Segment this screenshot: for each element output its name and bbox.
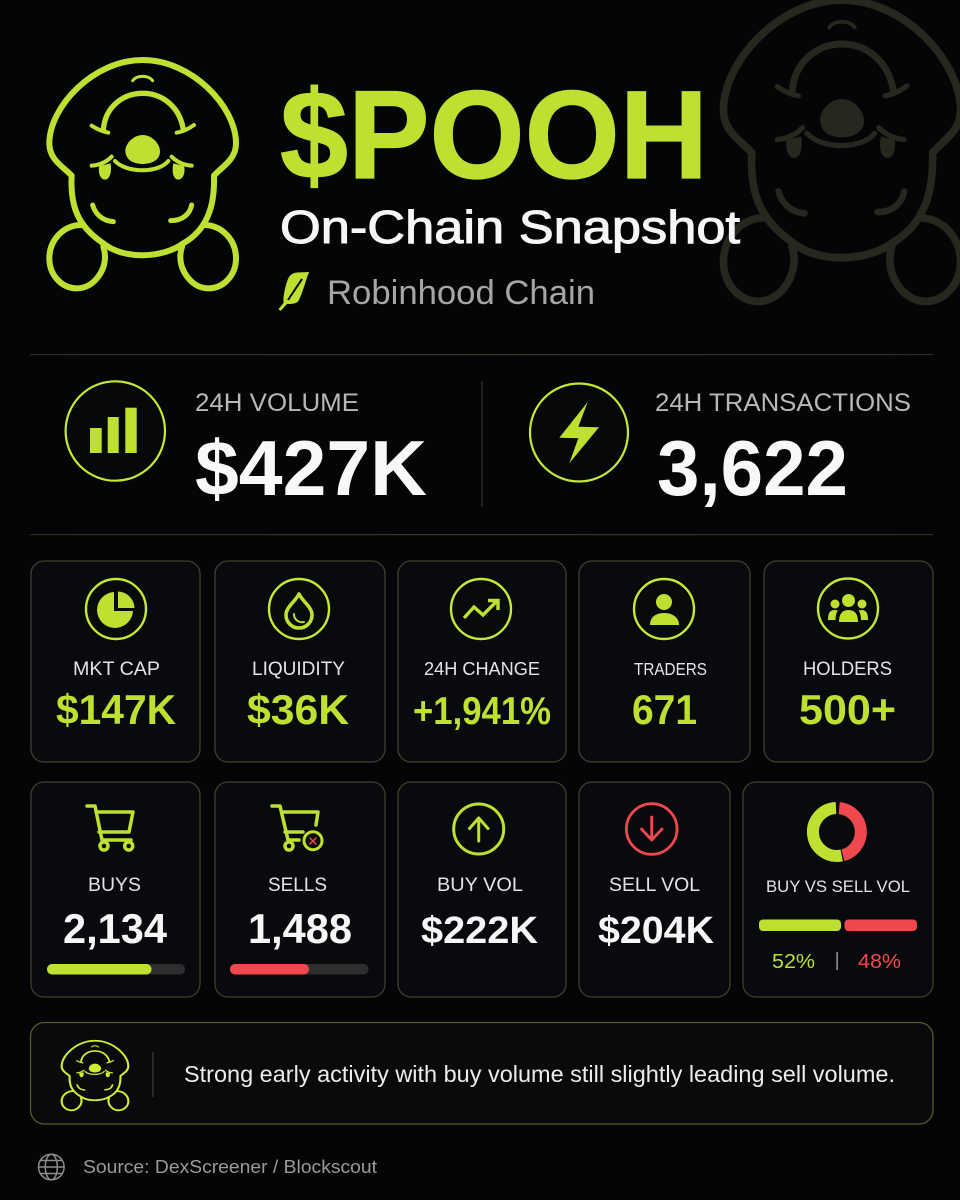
panel: summary callout xyxy=(30,1022,933,1124)
panel: buys xyxy=(31,782,200,997)
icon: bar chart xyxy=(66,381,165,481)
split bar xyxy=(759,920,917,931)
icon: cart xyxy=(87,806,133,850)
sells progress bar xyxy=(230,964,368,974)
panel: holders xyxy=(764,561,933,762)
change value: +1,941% xyxy=(413,690,551,733)
buy percentage: 52% xyxy=(772,951,815,973)
buy volume label: BUY VOL xyxy=(437,875,523,896)
icon: person xyxy=(634,579,694,639)
traders value: 671 xyxy=(632,686,697,733)
holders label: HOLDERS xyxy=(803,659,892,680)
volume label: 24H VOLUME xyxy=(195,389,359,417)
change label: 24H CHANGE xyxy=(424,659,540,679)
buys label: BUYS xyxy=(88,875,141,896)
panel: 24h transactions xyxy=(530,384,911,512)
icon: lightning bolt xyxy=(530,384,628,482)
subtitle: On-Chain Snapshot xyxy=(280,201,740,253)
icon: drop xyxy=(269,579,329,639)
comparison label: BUY VS SELL VOL xyxy=(766,877,910,896)
panel: buy vs sell volume xyxy=(743,782,933,997)
icon: up arrow xyxy=(454,804,504,854)
market cap label: MKT CAP xyxy=(73,659,160,680)
liquidity label: LIQUIDITY xyxy=(252,659,345,680)
donut chart xyxy=(813,808,861,856)
panel: sell volume xyxy=(579,782,730,997)
sell volume value: $204K xyxy=(598,910,715,952)
panel: buy volume xyxy=(398,782,566,997)
summary text: Strong early activity with buy volume still slightly leading sell volume. xyxy=(184,1061,895,1087)
source note: Source: DexScreener / Blockscout xyxy=(83,1157,377,1177)
buys value: 2,134 xyxy=(63,905,168,952)
sells label: SELLS xyxy=(268,875,327,896)
panel: market cap xyxy=(31,561,200,762)
mini mascot xyxy=(62,1041,128,1110)
watermark mascot xyxy=(723,0,960,301)
buy volume value: $222K xyxy=(421,910,539,952)
icon: globe xyxy=(38,1154,64,1180)
holders value: 500+ xyxy=(799,686,896,733)
transactions label: 24H TRANSACTIONS xyxy=(655,389,911,417)
icon: feather xyxy=(278,272,309,311)
icon: group xyxy=(818,578,878,638)
chain name: Robinhood Chain xyxy=(327,274,595,312)
mascot logo xyxy=(49,60,236,288)
transactions value: 3,622 xyxy=(657,424,848,512)
sell percentage: 48% xyxy=(858,951,901,973)
volume value: $427K xyxy=(195,424,427,512)
market cap value: $147K xyxy=(56,686,176,733)
panel: liquidity xyxy=(215,561,385,762)
icon: trend arrow xyxy=(451,579,511,639)
icon: pie chart xyxy=(86,579,146,639)
title: $POOH xyxy=(280,66,708,205)
panel: sells xyxy=(215,782,385,997)
liquidity value: $36K xyxy=(247,686,349,733)
panel: 24h volume xyxy=(66,381,427,512)
icon: cart with cancel badge xyxy=(272,806,322,850)
panel: 24h change xyxy=(398,561,566,762)
traders label: TRADERS xyxy=(634,659,707,679)
sells value: 1,488 xyxy=(248,905,352,952)
buys progress bar xyxy=(47,964,185,974)
icon: down arrow xyxy=(626,804,677,854)
panel: traders xyxy=(579,561,750,762)
sell volume label: SELL VOL xyxy=(609,875,700,896)
